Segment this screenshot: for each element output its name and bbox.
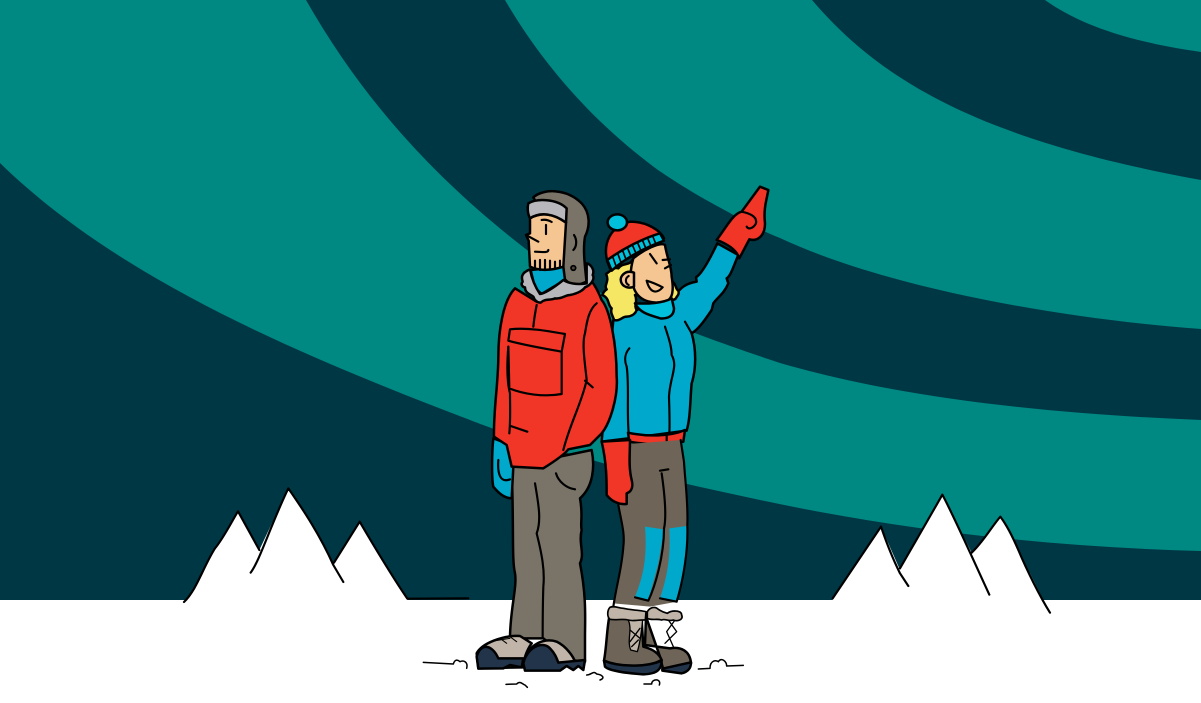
- woman waistband: [628, 430, 685, 444]
- mountain fill right: [833, 495, 1050, 613]
- grass strokes: [423, 660, 743, 687]
- man trouser seams: [535, 473, 575, 638]
- man scarf: [531, 267, 565, 294]
- aurora band: middle: [505, 0, 1201, 329]
- woman gaiter left: [635, 527, 664, 600]
- woman hair: [602, 258, 657, 320]
- man left shoe: [477, 636, 532, 668]
- woman right boot sole: [662, 662, 691, 673]
- woman hat: [606, 222, 664, 268]
- woman: [602, 187, 768, 674]
- mountain fill left: [184, 488, 407, 603]
- man ear flap details: [573, 235, 576, 250]
- woman left boot sole: [604, 661, 662, 674]
- woman hat band: [607, 233, 664, 271]
- mountain outline left: [184, 488, 468, 602]
- woman hanging mitten: [602, 440, 632, 504]
- woman left boot lace crosses: [630, 628, 640, 647]
- man face: [526, 214, 566, 270]
- man facial features: [526, 220, 560, 270]
- man chest pocket: [508, 329, 565, 395]
- snowy ground: [0, 600, 1201, 703]
- woman ear inner: [626, 276, 629, 285]
- woman ear: [621, 272, 634, 288]
- woman hat pompom: [608, 214, 627, 230]
- woman gaiter right: [660, 526, 687, 602]
- aurora band: lower: [0, 0, 1201, 551]
- woman upper body: [602, 187, 768, 444]
- woman left boot laces: [628, 620, 643, 652]
- man left shoe laces: [490, 637, 517, 643]
- woman right boot laces: [665, 620, 677, 647]
- woman hair right: [668, 282, 679, 300]
- man hat front: [528, 200, 567, 223]
- woman jacket and raised arm: [602, 243, 738, 442]
- woman scarf: [635, 298, 674, 318]
- man right shoe toe and sole: [523, 645, 585, 671]
- aurora bands: [0, 0, 1201, 551]
- woman trouser outlines and seams: [613, 440, 688, 607]
- woman face: [631, 244, 673, 302]
- man gloved hand: [492, 438, 513, 498]
- woman waistband seam: [663, 435, 670, 444]
- man trousers: [510, 450, 593, 662]
- aurora band: top right: [1045, 0, 1201, 52]
- man fur collar: [522, 263, 593, 303]
- mountains right: [833, 495, 1050, 613]
- man: [477, 191, 617, 671]
- man upper body: [494, 191, 617, 468]
- woman right boot: [645, 617, 691, 670]
- woman lower body: [602, 440, 691, 674]
- woman jacket seams: [625, 322, 692, 433]
- woman facial features: [647, 254, 671, 292]
- mitten thumb line: [742, 212, 756, 228]
- woman trousers: [613, 440, 688, 607]
- man right shoe: [525, 640, 575, 663]
- mountains left: [184, 488, 468, 603]
- man lower body: [477, 438, 593, 671]
- man jacket seams: [507, 303, 597, 450]
- man ear flap button: [571, 266, 576, 270]
- man left shoe toe: [477, 647, 523, 669]
- woman right boot fur: [647, 607, 682, 621]
- man glove thumb line: [498, 460, 510, 480]
- woman hat band ribs: [613, 236, 655, 266]
- man hat ear flap: [533, 191, 589, 285]
- grass tufts: [423, 660, 743, 687]
- woman left boot fur: [608, 607, 646, 621]
- man jacket: [494, 280, 617, 468]
- woman raised mitten: [717, 187, 768, 258]
- woman left boot: [604, 617, 662, 666]
- mountain outline right: [833, 495, 1050, 613]
